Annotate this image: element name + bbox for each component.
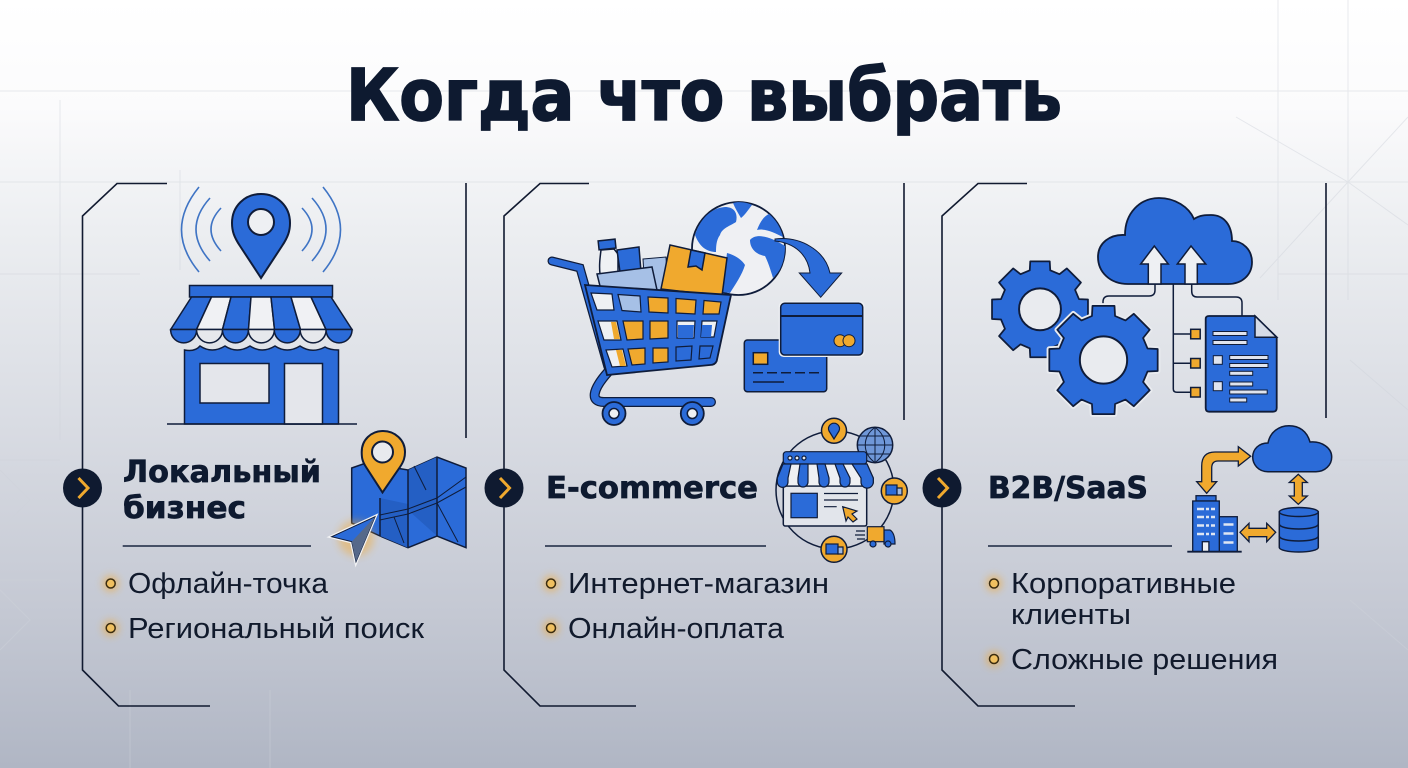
bullet list: Онлайн-оплата xyxy=(568,613,785,645)
chevron marker xyxy=(484,468,524,508)
heading: B2B/SaaS: B2B/SaaS xyxy=(988,471,1148,506)
bullet list: Офлайн-точка xyxy=(128,568,329,600)
chevron marker xyxy=(63,468,102,508)
bullet list xyxy=(543,568,829,645)
bullet list: клиенты xyxy=(1011,599,1131,631)
chevron marker xyxy=(922,468,962,508)
bullet list xyxy=(986,568,1278,676)
icon: storefront with location pin xyxy=(167,187,357,424)
icon: shopping cart, globe and cards xyxy=(552,202,865,425)
panel frame xyxy=(942,183,1326,706)
heading: local business: бизнес xyxy=(123,491,246,526)
heading: local business: Локальный xyxy=(123,455,321,490)
icon: cloud, building and database xyxy=(1187,426,1332,552)
heading: e-commerce: E-commerce xyxy=(546,471,758,506)
panel frame xyxy=(504,183,904,706)
bullet list: Интернет-магазин xyxy=(568,568,829,600)
title: Когда что выбрать xyxy=(346,54,1062,137)
bullet list: Региональный поиск xyxy=(128,613,424,645)
panel: B2B/SaaS xyxy=(922,183,1332,706)
panel: e-commerce xyxy=(484,183,907,706)
panel frame xyxy=(82,183,466,706)
panel: local business xyxy=(63,183,466,706)
bullet list: Сложные решения xyxy=(1011,644,1278,676)
icon: map with pin and cursor xyxy=(332,431,466,562)
icon: online store network xyxy=(776,418,907,562)
icon: gears, cloud and document xyxy=(992,198,1277,414)
bullet list xyxy=(103,568,424,645)
bullet list: Корпоративные xyxy=(1011,568,1236,600)
